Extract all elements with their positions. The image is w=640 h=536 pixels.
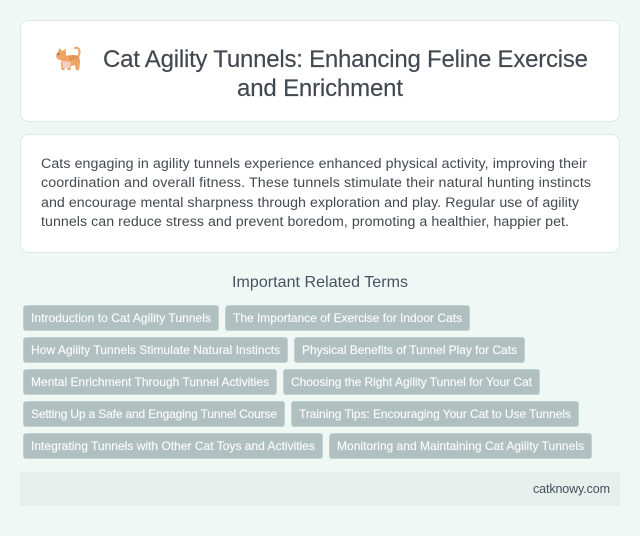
tag 8: Training Tips: Encouraging Your Cat to Use Tunnels	[299, 407, 571, 421]
tag 9	[24, 434, 322, 458]
tag 9: Integrating Tunnels with Other Cat Toys and Activities	[31, 439, 315, 453]
text block: summary paragraph	[41, 156, 591, 230]
tag 3: How Agility Tunnels Stimulate Natural Instincts	[31, 343, 280, 357]
icon: cat	[56, 48, 80, 70]
tag 7	[24, 402, 284, 426]
panel: intro text	[20, 134, 620, 252]
tag 6	[284, 370, 540, 394]
title: and Enrichment	[237, 75, 403, 102]
tag 1	[24, 306, 218, 330]
tag 4	[294, 338, 524, 362]
text block: summary paragraph: Cats engaging in agility tunnels experience enhanced physical activity, improving their	[41, 156, 587, 172]
text block: summary paragraph: and encourage mental sharpness through exploration and play. Regular use of agility	[41, 195, 580, 211]
tag 2	[226, 306, 470, 330]
text block: summary paragraph: coordination and overall fitness. These tunnels stimulate their natural hunting instincts	[41, 175, 591, 191]
footer	[20, 472, 620, 506]
footer: catknowy.com	[533, 482, 610, 496]
panel: header card	[20, 20, 620, 122]
tag 8	[292, 402, 578, 426]
tag list	[24, 306, 592, 458]
tag 10	[330, 434, 592, 458]
text block: summary paragraph: tunnels can reduce stress and prevent boredom, promoting a healthier, happier pet.	[41, 214, 569, 230]
tag 7: Setting Up a Safe and Engaging Tunnel Course	[31, 407, 277, 421]
title: Cat Agility Tunnels: Enhancing Feline Exercise	[103, 46, 588, 73]
title	[103, 46, 588, 102]
tag 5: Mental Enrichment Through Tunnel Activities	[31, 375, 269, 389]
tag 1: Introduction to Cat Agility Tunnels	[31, 311, 211, 325]
tag 3	[24, 338, 288, 362]
tag 4: Physical Benefits of Tunnel Play for Cats	[302, 343, 517, 357]
heading: related terms: Important Related Terms	[232, 274, 408, 291]
tag 2: The Importance of Exercise for Indoor Cats	[233, 311, 462, 325]
tag 10: Monitoring and Maintaining Cat Agility Tunnels	[337, 439, 584, 453]
tag 6: Choosing the Right Agility Tunnel for Your Cat	[291, 375, 533, 389]
tag 5	[24, 370, 276, 394]
